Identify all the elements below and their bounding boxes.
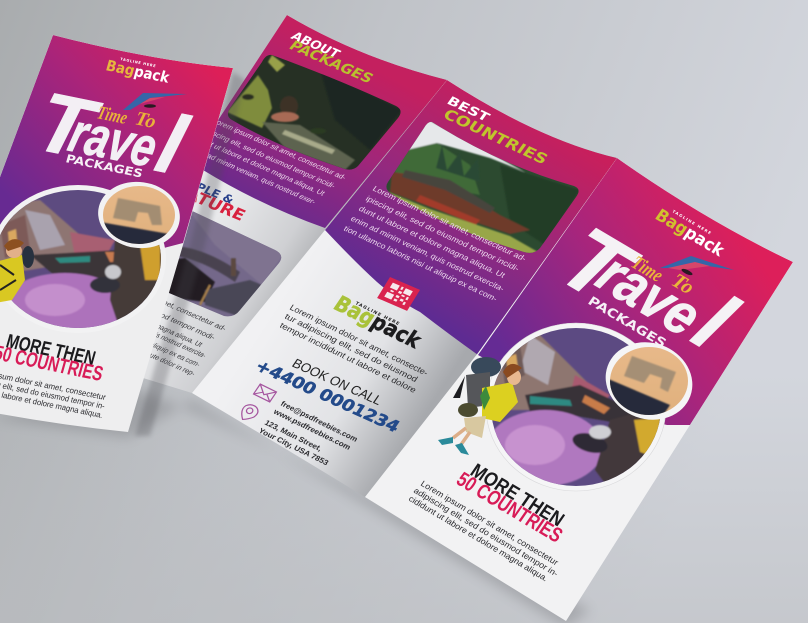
heading: about packages: PACKAGES	[286, 38, 377, 87]
panel: left brochure cover	[0, 30, 240, 440]
body text: adipiscing elit, sed do eiusmod tempor in-	[412, 485, 560, 578]
pink to purple header	[0, 35, 233, 249]
title: travel: T	[542, 208, 654, 325]
purple gradient header	[325, 80, 617, 355]
subtitle: packages: PACKAGES	[64, 151, 144, 180]
photo: bridge at dusk	[168, 211, 282, 316]
subtitle: packages: PACKAGES	[585, 293, 669, 350]
panel: about packages	[144, 15, 447, 393]
heading: more then: MORE THEN	[4, 331, 98, 370]
body text: enim ad minim veniam, quis nostrud exercita-	[349, 214, 506, 293]
pink to purple header	[478, 158, 793, 425]
tagline: TAGLINE HERE	[120, 57, 157, 68]
panel background	[0, 30, 240, 440]
title: travel: rave	[63, 101, 164, 179]
body text: Lorem ipsum dolor sit amet, consectetur ad-	[371, 184, 528, 263]
photo: canal city	[0, 190, 161, 328]
icon: mail	[254, 384, 276, 402]
script: time to: To	[133, 108, 159, 133]
heading: 50 countries: 50 COUNTRIES	[452, 468, 567, 547]
body text lower: Lorem ipsum dolor sit amet, consectetur ad-	[86, 265, 229, 333]
QR code badge	[377, 277, 420, 311]
contact details: www.psdfreebies.com	[271, 407, 353, 452]
body text: ipiscing elit, sed do eiusmod tempor incidi-	[364, 194, 521, 273]
illustration: backpacker boy	[438, 357, 522, 455]
script: time to	[97, 106, 155, 128]
photo: japanese temple	[386, 122, 579, 253]
contact details: free@psdfreebies.com	[279, 399, 360, 444]
body text: Lorem ipsum dolor sit amet, consectetur ad-	[211, 117, 348, 182]
panel background	[192, 80, 616, 496]
illustration: backpacker boy	[0, 239, 34, 303]
tagline: TAGLINE HERE	[354, 301, 400, 327]
heading: more then: MORE THEN	[466, 460, 568, 531]
heading: about packages: ABOUT	[288, 30, 343, 61]
icon: location pin	[237, 402, 261, 423]
tagline: TAGLINE HERE	[671, 209, 712, 235]
panel: front cover	[350, 150, 800, 623]
photo: arch monument	[103, 186, 175, 244]
small circle white ring	[98, 182, 180, 248]
contact details: 123, Main Street,	[263, 418, 324, 453]
body text lower: ipiscing elit, sed do eiusmod tempor modi-	[75, 274, 218, 342]
body text lower: dunt ut labore et dolore magna aliqua. Ut	[89, 293, 205, 349]
body text: dunt ut labore et dolore magna aliqua. Ut	[197, 136, 328, 198]
brochure cast shadow	[0, 390, 590, 623]
title: travel: l	[677, 277, 753, 369]
photo: arch monument	[605, 345, 695, 420]
photo: kayak on a forest river	[228, 54, 401, 170]
title: travel: T	[26, 74, 109, 177]
body text: dunt ut labore et dolore magna aliqua. Ut	[357, 204, 508, 280]
heading: people and nature: PEOPLE &	[168, 170, 237, 206]
icon: hang glider	[123, 93, 187, 110]
small circle white ring	[595, 330, 703, 432]
body text: ipiscing elit, sed do eiusmod tempor incidi-	[204, 127, 338, 190]
script: time to: Time	[627, 252, 667, 286]
contact paragraph: tur adipiscing elit, sed do eiusmod	[283, 311, 420, 384]
body text lower: modo consequat duis aute dolor in rep-	[82, 322, 198, 378]
book on call: BOOK ON CALL	[289, 356, 386, 408]
body text lower: enim ad minim veniam, quis nostrud exercita-	[84, 300, 209, 360]
contact paragraph: tempor incididunt ut labore et dolore	[278, 320, 419, 395]
heading: people and nature	[195, 182, 246, 221]
panel: best countries and contact	[192, 80, 617, 496]
heading: people and nature: NATURE	[169, 180, 249, 224]
script: time to: Time	[95, 103, 130, 129]
heading: best countries: BEST	[444, 93, 493, 124]
script: time to: To	[667, 268, 699, 299]
logo: Bagpack	[651, 206, 728, 261]
body text: enim ad minim veniam, quis nostrud exer-	[189, 145, 318, 206]
shadow of left brochure	[135, 72, 245, 436]
body text: cididunt ut labore et dolore magna aliqua.	[407, 493, 550, 583]
contact details	[257, 399, 360, 467]
contact paragraph	[278, 302, 430, 395]
icon: hang glider	[660, 256, 734, 276]
title: travel: rave	[586, 241, 713, 348]
body text lower	[150, 302, 225, 376]
title: travel	[542, 208, 753, 369]
contact paragraph: Lorem ipsum dolor sit amet, consecte-	[288, 302, 430, 378]
panel background	[144, 15, 446, 393]
body text: tion ullamco laboris nisi ut aliquip ex ea com-	[342, 224, 499, 303]
phone number: +4400 0001234	[252, 357, 403, 436]
photo: canal city	[485, 320, 670, 495]
large circle white ring	[0, 185, 165, 249]
contact details: Your City, USA 7853	[257, 426, 330, 467]
heading: best countries: COUNTRIES	[440, 106, 551, 168]
large circle white ring	[486, 323, 666, 491]
logo: Bagpack	[329, 292, 426, 354]
title: travel: l	[147, 96, 198, 193]
body text	[342, 184, 528, 303]
panel background	[350, 150, 800, 623]
body text: Lorem ipsum dolor sit amet, consectetur	[419, 478, 561, 567]
script: time to	[627, 252, 699, 299]
body text lower: tion ullamco laboris nisi ut aliquip ex ea com-	[78, 309, 203, 369]
purple gradient header	[204, 15, 447, 228]
logo: Bagpack	[104, 57, 172, 87]
